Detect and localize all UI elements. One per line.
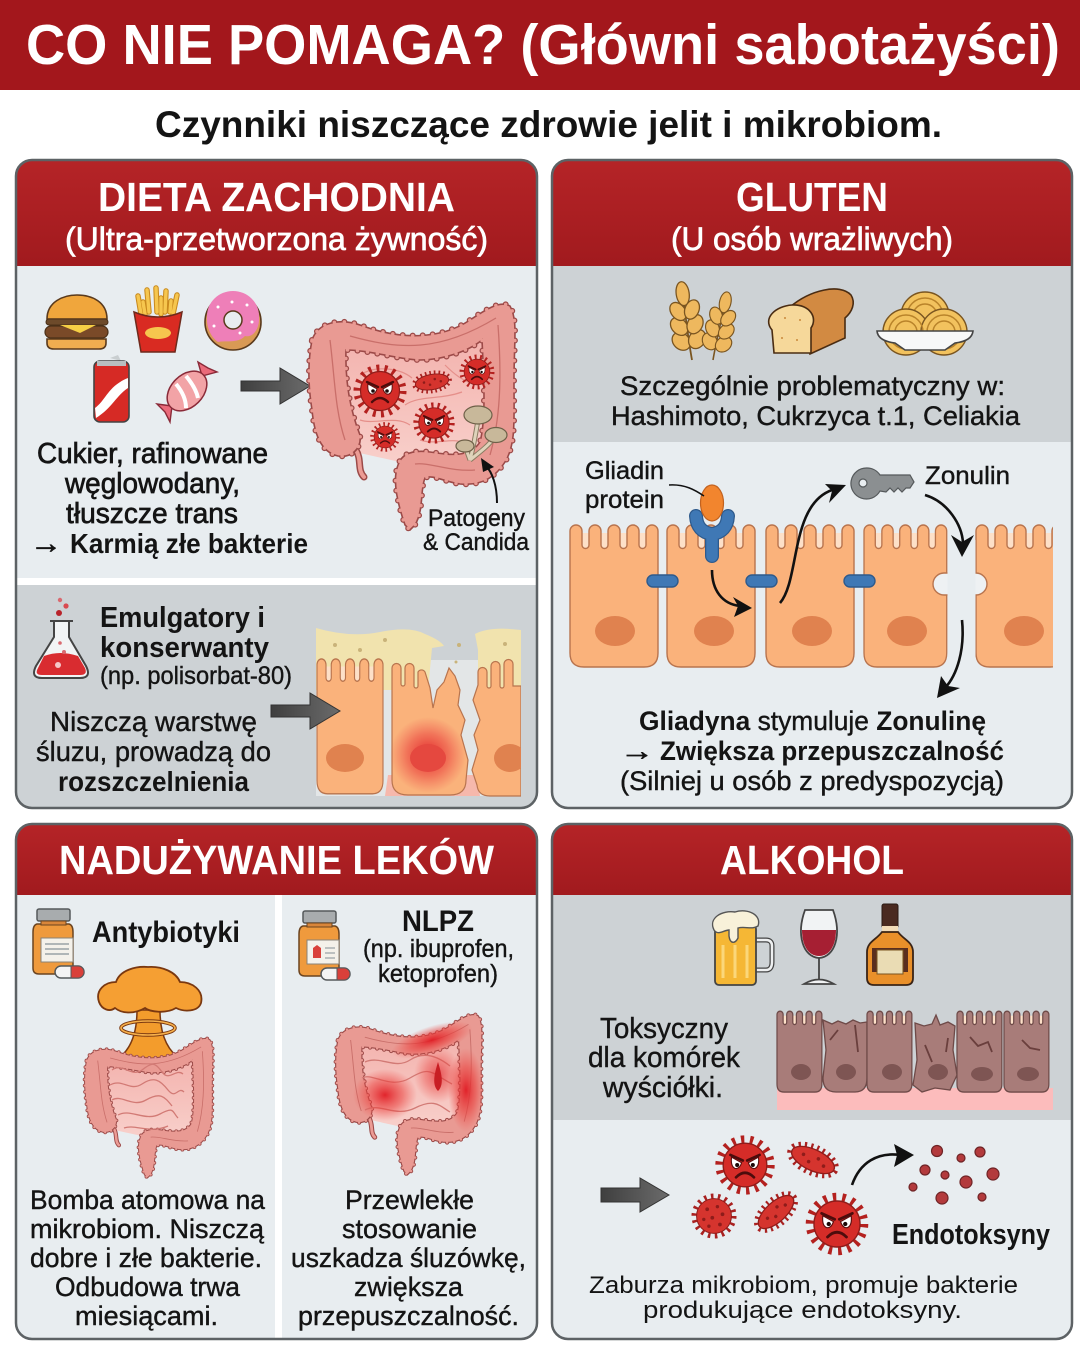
- label: zonulin: Zonulin: [925, 462, 1010, 490]
- text block: zaburza: [589, 1272, 1018, 1324]
- arrows: pathway: [669, 484, 974, 698]
- text block: conditions: Hashimoto, Cukrzyca t.1, Celiakia: [611, 401, 1021, 431]
- text block: gliadyna: Gliadyna stymuluje Zonulinę: [639, 706, 986, 736]
- text block: sugar: Cukier, rafinowane: [37, 438, 268, 470]
- text block: emulgatory: (np. polisorbat-80): [100, 662, 292, 690]
- label: patogeny: & Candida: [423, 529, 530, 556]
- panel: gluten: [552, 160, 1072, 808]
- icon: soda can: [94, 355, 129, 422]
- icon: flask: [34, 598, 88, 678]
- round bacterium: [695, 1197, 733, 1235]
- panel: dieta zachodnia: [16, 160, 537, 808]
- icon: burger: [45, 295, 108, 349]
- arrow: endotoxin release: [852, 1144, 914, 1185]
- icon: endotoxin dots: [909, 1146, 999, 1204]
- panel: nadużywanie leków: [16, 824, 537, 1339]
- gliadin receptor: [696, 485, 728, 556]
- opened junction: [933, 540, 987, 670]
- icon: whisky bottle: [867, 904, 913, 985]
- text block: emulgatory: konserwanty: [100, 632, 269, 664]
- diagram: leaky gut cells: [570, 468, 1064, 698]
- tight junctions: [647, 575, 875, 587]
- text block: gliadyna: Zwiększa przepuszczalność: [660, 736, 1004, 766]
- text block: antybiotyki: mikrobiom. Niszczą: [30, 1214, 265, 1244]
- text block: antybiotyki: dobre i złe bakterie.: [30, 1243, 262, 1273]
- illustration: damaged epithelium: [316, 628, 526, 796]
- text block: toksyczny: wyściółki.: [602, 1072, 723, 1104]
- arrow: alcohol to bacteria: [601, 1178, 669, 1212]
- title banner: [0, 0, 1080, 90]
- text block: toksyczny: [588, 1013, 740, 1104]
- text block: antybiotyki: [30, 1185, 266, 1331]
- text block: emulgatory: Emulgatory i: [100, 602, 265, 634]
- text block: conditions: [611, 371, 1021, 431]
- text block: nlpz: przepuszczalność.: [298, 1301, 519, 1331]
- icon: fries: [134, 288, 182, 352]
- icon: mushroom cloud: [98, 967, 201, 1060]
- subtitle: Czynniki niszczące zdrowie jelit i mikrobiom.: [155, 104, 942, 145]
- label: nlpz: (np. ibuprofen,: [363, 935, 514, 963]
- icon: bread: [769, 289, 853, 354]
- text block: zaburza: Zaburza mikrobiom, promuje bakterie: [589, 1272, 1018, 1299]
- illustration: damaged cells: [777, 1011, 1053, 1110]
- heading: gluten: (U osób wrażliwych): [671, 221, 953, 257]
- icon: wine: [801, 910, 837, 984]
- label: nlpz: ketoprofen): [378, 960, 498, 988]
- text block: sugar: tłuszcze trans: [66, 498, 238, 530]
- label: endotoksyny: Endotoksyny: [892, 1219, 1050, 1251]
- text block: nlpz: zwiększa: [354, 1272, 464, 1302]
- icon: donut: [205, 291, 261, 350]
- cell row: [570, 525, 1064, 667]
- illustration: inflamed colon: [336, 1014, 484, 1175]
- text block: niszczą: rozszczelnienia: [58, 766, 249, 797]
- text block: sugar: [30, 438, 308, 560]
- heading: gluten: [671, 174, 953, 257]
- panel: alkohol: [552, 824, 1072, 1339]
- text block: conditions: Szczególnie problematyczny w:: [620, 371, 1005, 401]
- label: gliadin protein: protein: [585, 486, 664, 514]
- label: patogeny: [423, 505, 530, 556]
- icon: wheat: [661, 279, 745, 364]
- arrow: food to colon: [241, 368, 310, 404]
- text block: sugar: →: [30, 528, 62, 560]
- label: nlpz: NLPZ: [402, 905, 474, 938]
- text block: nlpz: uszkadza śluzówkę,: [291, 1243, 526, 1273]
- label: antybiotyki: Antybiotyki: [92, 916, 240, 949]
- text block: zaburza: produkujące endotoksyny.: [643, 1297, 962, 1324]
- text block: nlpz: Przewlekłe: [345, 1185, 474, 1215]
- text block: toksyczny: Toksyczny: [600, 1013, 728, 1045]
- label: patogeny: Patogeny: [428, 505, 525, 532]
- label: nlpz: [363, 905, 514, 988]
- title banner: CO NIE POMAGA? (Główni sabotażyści): [26, 13, 1060, 77]
- heading: dieta zachodnia: DIETA ZACHODNIA: [98, 174, 455, 220]
- text block: gliadyna: (Silniej u osób z predyspozycją): [620, 766, 1004, 796]
- illustration: nuked colon: [85, 967, 213, 1178]
- heading: gluten: GLUTEN: [736, 174, 888, 220]
- text block: niszczą: Niszczą warstwę: [50, 706, 257, 737]
- icon: candy: [157, 362, 217, 422]
- text block: niszczą: śluzu, prowadzą do: [36, 736, 271, 767]
- text block: antybiotyki: miesiącami.: [75, 1301, 218, 1331]
- heading: dieta zachodnia: [65, 174, 488, 257]
- text block: gliadyna: →: [620, 736, 654, 766]
- illustration: bacteria: [695, 1139, 863, 1250]
- illustration: inflamed colon with bacteria: [309, 304, 515, 530]
- label: gliadin protein: Gliadin: [585, 457, 664, 485]
- text block: emulgatory: [100, 602, 292, 690]
- text block: sugar: Karmią złe bakterie: [70, 528, 308, 559]
- text block: antybiotyki: Odbudowa trwa: [55, 1272, 241, 1302]
- text block: nlpz: stosowanie: [342, 1214, 477, 1244]
- text block: gliadyna: [620, 706, 1004, 796]
- arrow: emulsifiers to epithelium: [271, 693, 340, 729]
- heading: dieta zachodnia: (Ultra-przetworzona żywność): [65, 221, 488, 257]
- label: gliadin protein: [585, 457, 664, 514]
- icon: antibiotic bottle: [33, 909, 84, 978]
- text block: antybiotyki: Bomba atomowa na: [30, 1185, 266, 1215]
- text block: toksyczny: dla komórek: [588, 1042, 740, 1074]
- icon: zonulin key: [851, 468, 914, 499]
- icon: nsaid bottle: [299, 911, 350, 980]
- icon: candida mushrooms: [456, 406, 507, 460]
- icon: pasta plate: [877, 292, 973, 355]
- icon: beer: [713, 911, 772, 985]
- arrow: candida pointer: [481, 458, 497, 503]
- text block: nlpz: [291, 1185, 526, 1331]
- heading: nadużywanie leków: NADUŻYWANIE LEKÓW: [59, 837, 494, 883]
- heading: alkohol: ALKOHOL: [720, 837, 904, 883]
- text block: niszczą: [36, 706, 271, 797]
- text block: sugar: węglowodany,: [64, 468, 240, 500]
